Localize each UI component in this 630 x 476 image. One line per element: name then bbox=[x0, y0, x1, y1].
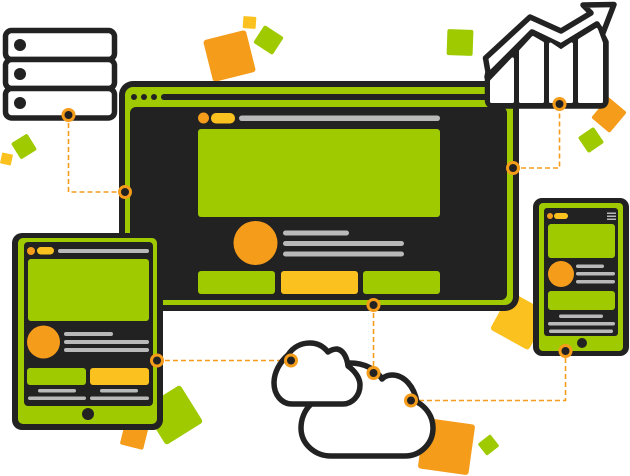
rising bar chart with arrow bbox=[486, 4, 614, 106]
cloud icon: small bbox=[274, 343, 360, 404]
tablet device bbox=[12, 233, 163, 430]
connection nodes bbox=[63, 98, 571, 406]
server stack icon bbox=[6, 30, 114, 118]
desktop browser window bbox=[119, 81, 519, 311]
connector lines bbox=[68, 104, 566, 400]
cloud icon: large bbox=[301, 363, 433, 456]
smartphone device bbox=[533, 198, 629, 356]
chart bars bbox=[492, 30, 602, 102]
